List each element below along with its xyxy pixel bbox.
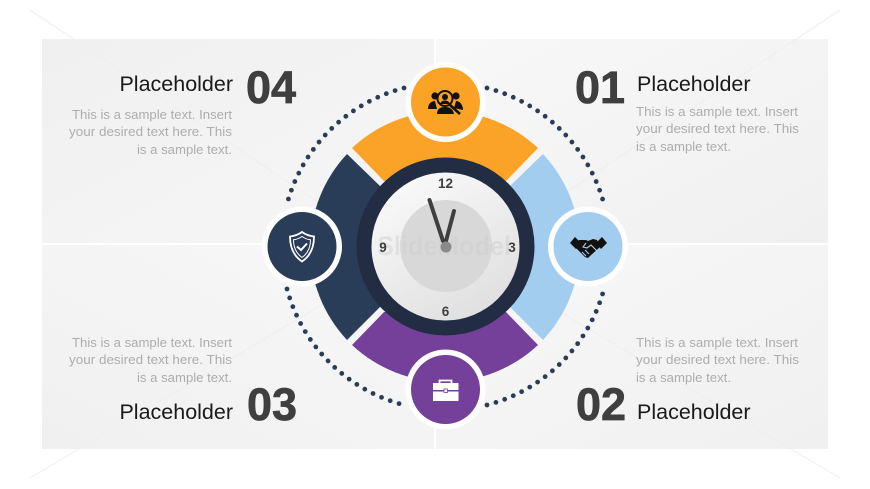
icon: handshake [570,237,607,258]
text block: 03 [69,335,297,430]
clock hub [440,242,452,252]
body text 03 [69,335,233,385]
number 02: 02 [576,379,626,430]
segment: purple [352,312,538,382]
clock numerals: 6 [442,304,450,319]
body text 02: This is a sample text. Insert [636,335,798,350]
text block: 02 [576,335,800,430]
body text 04: This is a sample text. Insert [72,107,232,122]
number 01: 01 [575,62,625,113]
body text 03: your desired text here. This [69,352,233,367]
clock numerals: 3 [508,240,516,255]
node: navy shield [262,206,342,286]
body text 01: is a sample text. [636,139,731,154]
clock numerals: 9 [379,240,387,255]
watermark: SlideModel [377,231,511,261]
icon: shield check [290,232,314,262]
icon: briefcase [433,380,458,401]
heading: placeholder 01: Placeholder [637,72,751,96]
body text 03: This is a sample text. Insert [72,335,232,350]
text block: 01 [575,62,800,154]
body text 01: your desired text here. This [636,121,800,136]
body text 02: your desired text here. This [636,352,800,367]
body text 02 [636,335,800,385]
panel: 01 background [436,39,828,243]
segment: orange [352,111,538,181]
heading: placeholder 02: Placeholder [637,400,751,424]
text block: 04 [69,62,296,157]
clock numerals: 12 [438,176,453,191]
node: orange people search [406,62,486,142]
heading: placeholder 04: Placeholder [119,72,233,96]
number 04: 04 [246,62,296,113]
clock numerals [379,176,516,319]
body text 03: is a sample text. [137,370,232,385]
body text 04: your desired text here. This [69,124,233,139]
body text 01: This is a sample text. Insert [636,104,798,119]
segment: navy [310,154,380,340]
node: purple briefcase [406,350,486,430]
dotted ring [287,88,604,405]
number 03: 03 [247,379,297,430]
body text 01 [636,104,800,154]
clock [356,158,534,336]
body text 02: is a sample text. [636,370,731,385]
node: light blue handshake [548,206,628,286]
panel: 03 background [42,245,434,449]
heading: placeholder 03: Placeholder [119,400,233,424]
body text 04: is a sample text. [137,142,232,157]
panel: 02 background [436,245,828,449]
clock hands [430,200,454,241]
panel: 04 background [42,39,434,243]
icon: people with magnifier [428,91,463,114]
segment: light blue [510,154,580,340]
body text 04 [69,107,233,157]
